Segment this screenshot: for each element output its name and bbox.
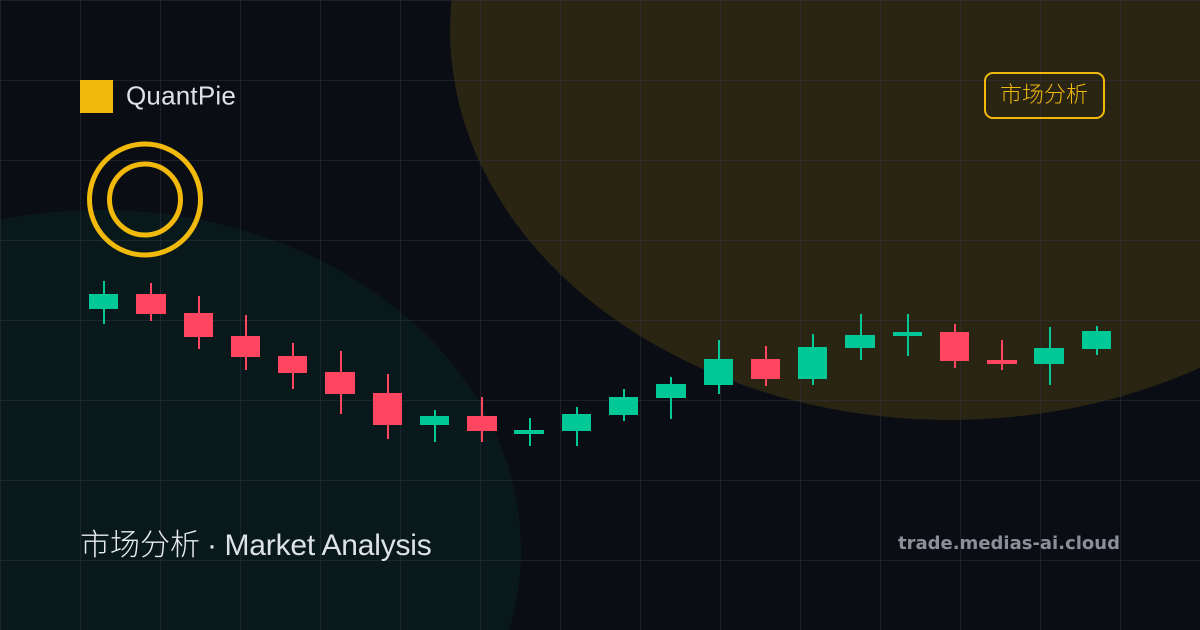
title: Market Analysis bbox=[224, 529, 432, 562]
logo mark: gold square bbox=[80, 80, 113, 113]
category tag bbox=[985, 73, 1104, 118]
category tag: 市场分析 bbox=[1000, 77, 1088, 109]
brand name: QuantPie bbox=[126, 80, 236, 110]
candlestick chart bbox=[89, 281, 1111, 446]
title: · bbox=[207, 529, 217, 562]
teal background ellipse bbox=[0, 210, 521, 630]
title: 市场分析 bbox=[80, 529, 200, 562]
icon: concentric gold rings bbox=[90, 144, 200, 255]
gold background ellipse bbox=[450, 0, 1200, 420]
footer URL: trade.medias-ai.cloud bbox=[898, 533, 1120, 554]
